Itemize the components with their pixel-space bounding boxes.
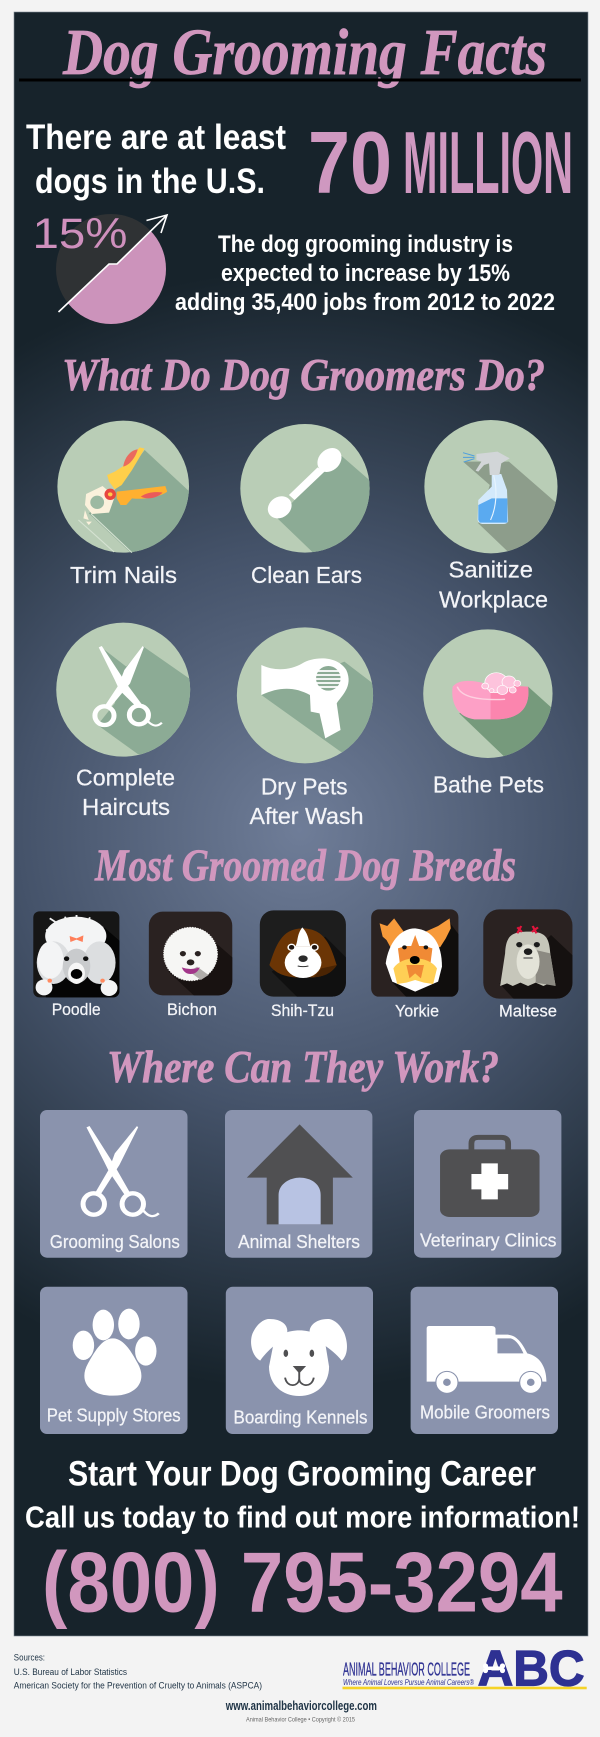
- label: poodle: Poodle: [52, 1000, 101, 1019]
- logo name: ANIMAL BEHAVIOR COLLEGE: [343, 1660, 470, 1680]
- sources: American Society for the Prevention of Cruelty to Animals (ASPCA): [14, 1681, 262, 1692]
- icon: yorkie: [371, 909, 463, 1000]
- panel: breeds: [33, 909, 574, 1021]
- label: dry pets after wash: Dry Pets: [261, 773, 348, 799]
- logo yellow bar: [342, 1687, 587, 1689]
- logo bone: [483, 1663, 505, 1673]
- icon: dog house: [247, 1124, 353, 1224]
- card background: [414, 1110, 561, 1258]
- website: www.animalbehaviorcollege.com: [225, 1699, 377, 1713]
- card background: [411, 1287, 558, 1434]
- chart: 15% growth pie with arrow: [36, 214, 168, 324]
- sources: [14, 1653, 262, 1692]
- card: mobile groomers: [411, 1287, 558, 1434]
- label: yorkie: Yorkie: [395, 1002, 439, 1021]
- text: dogs in the U.S.: dogs in the U.S.: [35, 162, 265, 201]
- label: Pet Supply Stores: [47, 1405, 181, 1426]
- label: Boarding Kennels: [234, 1406, 368, 1427]
- label: complete haircuts: [76, 765, 175, 820]
- text: start your career: Start Your Dog Grooming Career: [68, 1455, 536, 1494]
- label: sanitize workplace: Workplace: [439, 586, 548, 612]
- stat: 70 million dogs: [26, 113, 573, 212]
- icon: medical case: [440, 1137, 540, 1217]
- icon: soap: [423, 629, 554, 760]
- panel: tasks: [56, 420, 559, 829]
- card background: [226, 1287, 373, 1434]
- icon: shih-tzu: [260, 910, 352, 1000]
- logo: Animal Behavior College: [342, 1640, 587, 1696]
- label: Animal Shelters: [238, 1231, 360, 1252]
- card: pet supply stores: [40, 1287, 188, 1434]
- label: dry pets after wash: [250, 773, 364, 829]
- pie dark part: [56, 214, 166, 324]
- label: bathe pets: Bathe Pets: [433, 771, 544, 797]
- call to action: [25, 1455, 580, 1631]
- logo tagline: Where Animal Lovers Pursue Animal Careers®: [343, 1677, 475, 1687]
- icon: scissors: [56, 623, 191, 758]
- label: sanitize workplace: Sanitize: [448, 557, 533, 583]
- text: 15%: 15%: [32, 210, 128, 258]
- label: clean ears: Clean Ears: [251, 562, 362, 588]
- icon: scissors: [83, 1126, 159, 1216]
- heading: most groomed dog breeds: Most Groomed Dog Breeds: [94, 841, 516, 891]
- label: Veterinary Clinics: [420, 1230, 556, 1251]
- card: grooming salons: [40, 1110, 188, 1258]
- icon: maltese: [483, 909, 574, 1003]
- card: animal shelters: [225, 1110, 372, 1258]
- text: industry growth: adding 35,400 jobs from 2012 to 2022: [175, 289, 555, 316]
- card background: [40, 1110, 188, 1258]
- card: veterinary clinics: [414, 1110, 561, 1258]
- label: dry pets after wash: After Wash: [250, 803, 364, 829]
- pie pink part: [68, 232, 166, 324]
- card background: [225, 1110, 372, 1258]
- text: industry growth: The dog grooming industry is: [218, 231, 513, 258]
- sources: Sources:: [14, 1653, 45, 1664]
- logo letters ABC: ABC: [478, 1640, 585, 1696]
- text: industry growth: expected to increase by 15%: [221, 260, 510, 287]
- icon: spray bottle: [424, 420, 559, 557]
- icon: nail clippers: [57, 421, 191, 557]
- arrow: [58, 215, 167, 312]
- icon: background scissors: [494, 0, 600, 135]
- label: Mobile Groomers: [420, 1401, 550, 1422]
- icon: van: [427, 1326, 546, 1393]
- number: 70: 70: [308, 113, 392, 212]
- label: complete haircuts: Complete: [76, 765, 175, 791]
- card: boarding kennels: [226, 1287, 373, 1434]
- label: shih-tzu: Shih-Tzu: [271, 1001, 334, 1020]
- heading: what do dog groomers do: What Do Dog Groomers Do?: [62, 350, 545, 400]
- label: sanitize workplace: [439, 557, 548, 612]
- icon: paw: [73, 1309, 157, 1396]
- text: industry growth: [175, 231, 555, 316]
- text: there are at least: There are at least: [26, 118, 286, 157]
- card background: [40, 1287, 188, 1434]
- panel: workplaces: [40, 1110, 561, 1434]
- icon: dog face: [251, 1319, 347, 1396]
- sources: U.S. Bureau of Labor Statistics: [14, 1667, 127, 1678]
- copyright: Animal Behavior College • Copyright © 2015: [246, 1716, 355, 1724]
- icon: hair dryer: [237, 627, 375, 765]
- icon: bichon: [149, 912, 237, 1000]
- label: bichon: Bichon: [167, 1000, 217, 1019]
- title rule: [19, 78, 581, 82]
- label: Grooming Salons: [50, 1231, 180, 1252]
- icon: cotton swab: [240, 424, 371, 557]
- label: maltese: Maltese: [499, 1002, 557, 1021]
- label: trim nails: Trim Nails: [70, 562, 177, 588]
- icon: poodle: [33, 911, 126, 1000]
- heading: where can they work: Where Can They Work?: [107, 1042, 499, 1092]
- label: complete haircuts: Haircuts: [82, 794, 170, 820]
